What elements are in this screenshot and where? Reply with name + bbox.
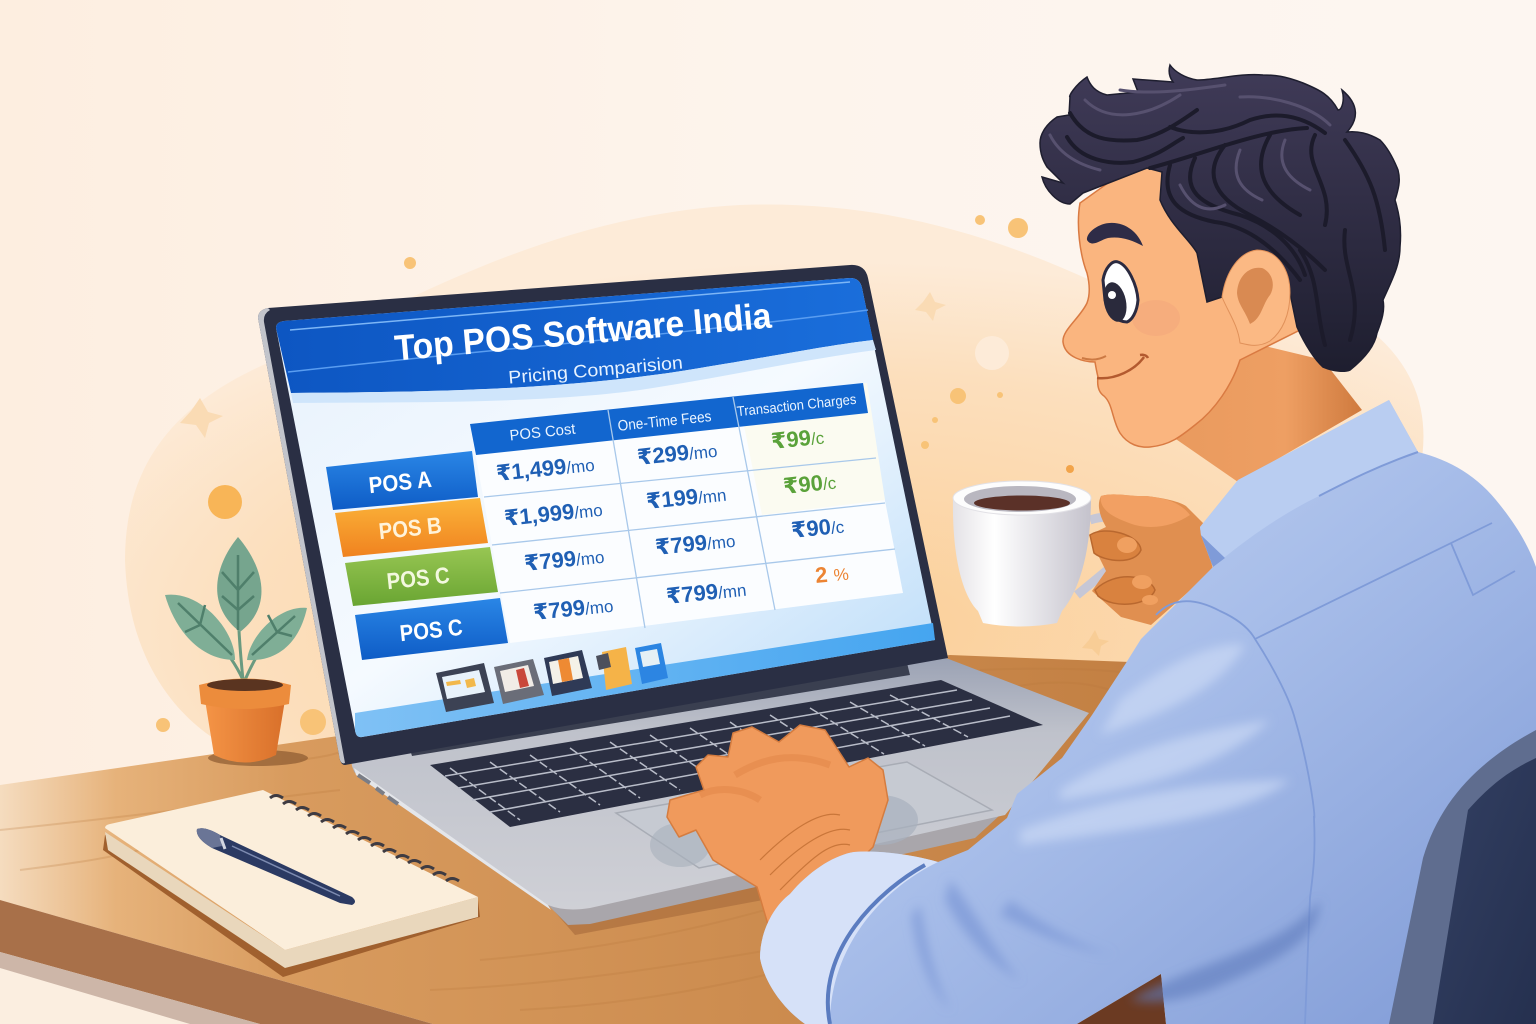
silver lid edge (258, 308, 345, 763)
stem and leaves (165, 537, 307, 680)
desk (0, 655, 1166, 1024)
device icons row (436, 643, 668, 712)
side ports (358, 775, 398, 804)
head and face (1063, 160, 1300, 447)
smile (1097, 355, 1148, 378)
grid lines (484, 397, 895, 628)
POS C label (345, 547, 498, 606)
POS C label: POS C (385, 562, 451, 594)
prices: ₹99/c (770, 424, 826, 454)
man (650, 65, 1536, 1024)
sleeve fold shading (912, 644, 1320, 1010)
laptop shadow on desk (555, 880, 790, 935)
POS A label: POS A (367, 466, 433, 498)
desk shadow band (0, 952, 260, 1024)
wood grain (0, 669, 1120, 1010)
header labels: Transaction Charges (736, 391, 857, 419)
chair (1389, 730, 1536, 1024)
shirt body and sleeve (760, 400, 1536, 1024)
header labels: One-Time Fees (617, 408, 712, 435)
ear (1222, 250, 1290, 345)
hand on trackpad (650, 725, 918, 935)
prices: ₹799/mo (532, 592, 614, 625)
pricing table (470, 383, 903, 643)
blue banner (276, 278, 873, 393)
peach background blob (125, 205, 1423, 771)
prices: ₹1,499/mo (495, 451, 596, 486)
hinge (408, 663, 910, 756)
POS B label (335, 498, 488, 557)
POS C blue label (355, 598, 508, 660)
eye (1100, 262, 1138, 324)
header labels (509, 391, 857, 444)
collar (1200, 400, 1418, 567)
prices: ₹199/mn (645, 481, 727, 514)
shirt seams and folds (1156, 523, 1515, 1024)
eyebrow (1087, 223, 1143, 246)
background dots (156, 215, 1109, 735)
hair (1040, 65, 1401, 371)
title: Top POS Software India (393, 295, 774, 368)
POS B label: POS B (377, 512, 443, 544)
desk front face (0, 900, 433, 1024)
prices: ₹90/c (790, 513, 846, 543)
screen bezel (258, 265, 948, 765)
keyboard key gaps (445, 690, 1010, 820)
hand holding cup (1089, 494, 1213, 625)
nostril line (1082, 356, 1106, 360)
table header (470, 383, 868, 455)
prices: ₹799/mn (665, 576, 747, 609)
neck (1170, 340, 1362, 482)
floor (0, 900, 433, 1024)
pen (197, 828, 355, 905)
potted plant (165, 537, 308, 766)
prices: ₹799/mo (523, 543, 605, 576)
subtitle: Pricing Comparision (507, 352, 684, 388)
screen (276, 278, 935, 737)
bottom screen band (355, 623, 935, 737)
dark desk gap under sleeve (1077, 974, 1166, 1024)
POS C blue label: POS C (398, 614, 464, 646)
prices: ₹299/mo (636, 437, 718, 470)
blush (1132, 300, 1180, 336)
prices: ₹1,999/mo (503, 496, 604, 531)
POS A label (326, 451, 478, 510)
coffee cup (953, 481, 1126, 626)
spiral binding (270, 796, 459, 881)
prices (495, 424, 850, 625)
laptop (258, 265, 1089, 925)
keyboard (430, 680, 1043, 827)
cuff highlight (760, 852, 938, 1024)
header labels: POS Cost (509, 421, 577, 444)
pot (205, 700, 285, 762)
trackpad (616, 762, 992, 868)
product labels (326, 451, 508, 660)
notebook (103, 790, 480, 977)
prices: ₹799/mo (654, 527, 736, 560)
prices: ₹90/c (782, 469, 838, 499)
keyboard deck (352, 658, 1089, 925)
prices: 2 % (814, 560, 850, 588)
desk top surface (0, 655, 1166, 1024)
cuff seam (828, 865, 925, 1024)
